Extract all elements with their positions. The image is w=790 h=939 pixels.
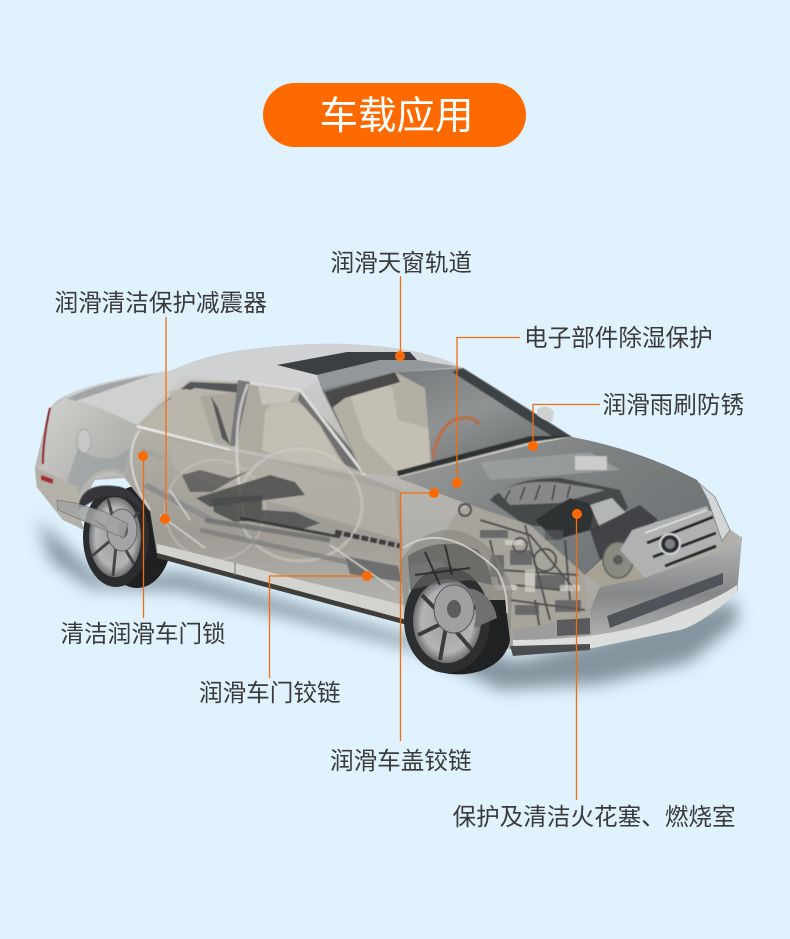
label: sunroof track: 润滑天窗轨道 bbox=[330, 250, 472, 276]
sunroof bbox=[277, 352, 460, 390]
rear wheel bbox=[83, 486, 172, 588]
lower front corner bbox=[510, 644, 590, 656]
front wheel bbox=[403, 538, 510, 674]
door sill bbox=[157, 544, 407, 625]
hood bbox=[398, 437, 715, 575]
label: electronics: 电子部件除湿保护 bbox=[524, 326, 713, 352]
door panels and chassis see-through bbox=[125, 384, 407, 620]
engine bay bbox=[440, 452, 658, 640]
callout lines bbox=[144, 276, 600, 800]
radiator and fan bbox=[585, 542, 660, 592]
label: hood hinge: 润滑车盖铰链 bbox=[330, 748, 472, 774]
label: spark plug and combustion chamber: 保护及清洁火花塞、燃烧室 bbox=[452, 804, 736, 830]
callout dots bbox=[138, 351, 582, 581]
exhaust muffler bbox=[57, 500, 128, 538]
car body silhouette bbox=[35, 344, 742, 650]
label: door hinge: 润滑车门铰链 bbox=[199, 680, 341, 706]
car ground shadow bbox=[38, 520, 738, 690]
label: wipers: 润滑雨刷防锈 bbox=[602, 392, 744, 418]
windshield with interior bbox=[322, 368, 572, 476]
title pill bbox=[265, 83, 526, 147]
side mirror bbox=[537, 407, 554, 422]
label: shock absorber: 润滑清洁保护减震器 bbox=[54, 290, 267, 316]
front wheel arch bbox=[400, 530, 512, 672]
headlight bbox=[699, 483, 730, 541]
title pill: 车载应用 bbox=[319, 95, 474, 138]
label: door lock: 清洁润滑车门锁 bbox=[60, 622, 226, 648]
front door window and seat bbox=[230, 380, 365, 475]
rear door window and seat bbox=[137, 380, 243, 451]
grille bbox=[620, 506, 721, 578]
roof bbox=[170, 344, 463, 392]
front bumper bbox=[513, 536, 742, 652]
trunk and rear quarter bbox=[35, 368, 190, 525]
